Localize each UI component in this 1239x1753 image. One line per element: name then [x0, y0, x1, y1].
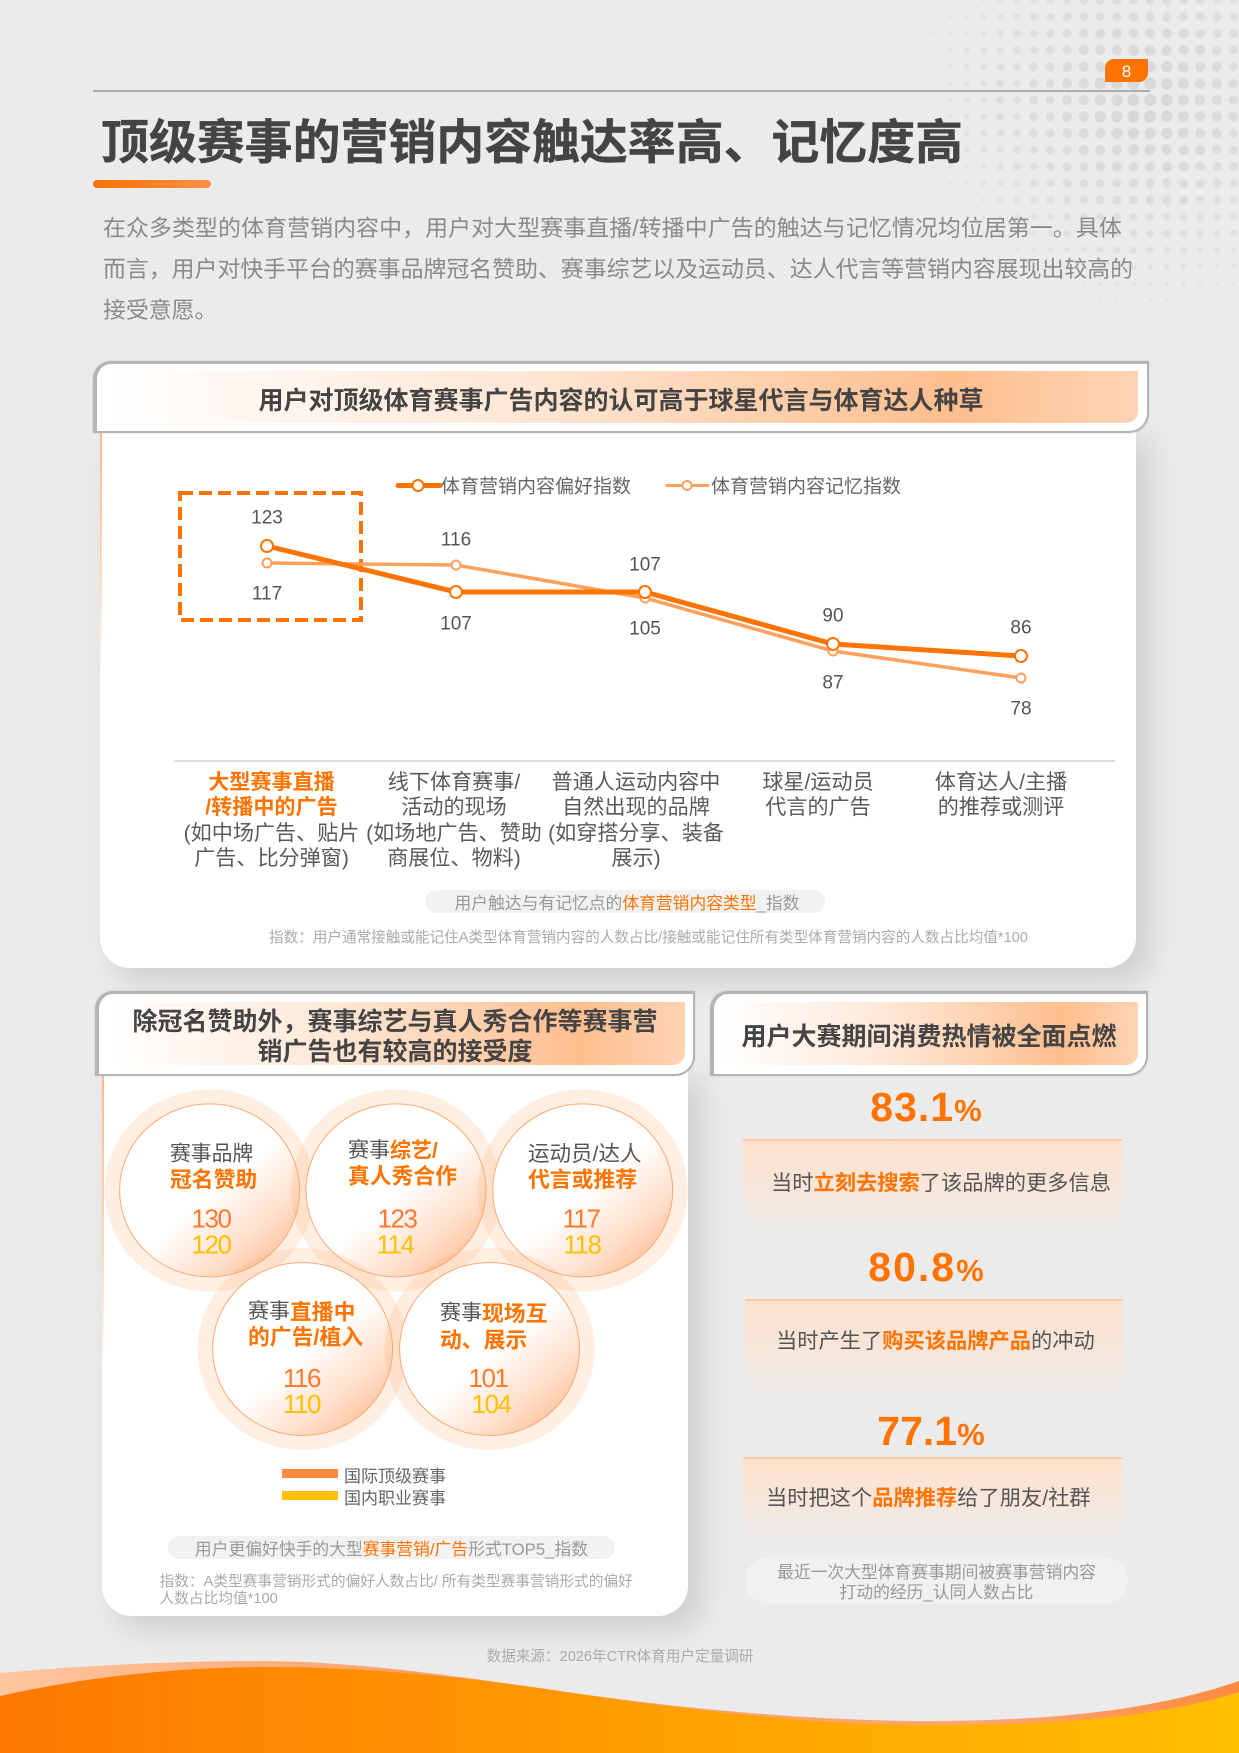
bubble: variety and reality show: 赛事综艺/ — [348, 1139, 438, 1162]
data labels: 105 — [629, 618, 661, 640]
bubble: variety and reality show: 114 — [377, 1230, 415, 1260]
legend: bubble colours — [282, 1467, 446, 1508]
title: 顶级赛事的营销内容触达率高、记忆度高 — [101, 117, 963, 170]
data labels: 107 — [629, 554, 661, 576]
heading: top 5: 除冠名赞助外，赛事综艺与真人秀合作等赛事营 — [132, 1008, 658, 1036]
category label 3: 自然出现的品牌 — [562, 796, 710, 819]
series: memory index — [262, 558, 1026, 682]
bubble: title sponsorship: 冠名赞助 — [170, 1167, 257, 1192]
category label 1: 大型赛事直播 — [208, 771, 335, 794]
panel: ad content recognition line chart — [100, 425, 1136, 968]
data labels: 87 — [822, 672, 844, 694]
panel header: top 5 — [95, 991, 695, 1076]
stat caption pill: 打动的经历_认同人数占比 — [840, 1582, 1033, 1602]
bubble: title sponsorship: 130 — [192, 1204, 231, 1234]
data source: 数据来源：2026年CTR体育用户定量调研 — [487, 1649, 753, 1665]
heading: top 5 — [132, 1008, 658, 1066]
bubble: athlete endorsement: 117 — [563, 1204, 601, 1234]
highlight dashed box — [180, 493, 361, 620]
panel header: chart panel — [93, 361, 1149, 433]
data labels: 78 — [1010, 698, 1032, 720]
bubble: variety and reality show — [291, 1089, 501, 1291]
bubble: live broadcast ads: 的广告/植入 — [248, 1324, 363, 1350]
category label 4: 代言的广告 — [765, 796, 871, 819]
stat box 3 — [743, 1457, 1122, 1538]
data labels: 90 — [822, 606, 844, 626]
stat box 2 — [745, 1298, 1123, 1392]
bubble: on-site interaction: 赛事现场互 — [440, 1300, 547, 1326]
bubble: athlete endorsement: 代言或推荐 — [528, 1167, 637, 1192]
legend: bubble colours: 国际顶级赛事 — [344, 1467, 446, 1486]
bubble: athlete endorsement — [478, 1089, 688, 1291]
data labels: 123 — [251, 508, 283, 528]
stat caption pill: 最近一次大型体育赛事期间被赛事营销内容 — [777, 1562, 1096, 1582]
category label 3: 展示) — [611, 847, 661, 870]
category label 1 — [184, 770, 359, 870]
intro paragraph: 在众多类型的体育营销内容中，用户对大型赛事直播/转播中广告的触达与记忆情况均位居第一。具体 — [103, 214, 1122, 240]
category label 4: 球星/运动员 — [762, 771, 874, 794]
intro paragraph — [103, 214, 1133, 322]
stat box 2: 当时产生了购买该品牌产品的冲动 — [776, 1328, 1095, 1352]
category label 2: 活动的现场 — [401, 796, 507, 819]
category label 5: 的推荐或测评 — [938, 796, 1064, 819]
page number tab — [1105, 59, 1148, 82]
bubble: on-site interaction: 104 — [472, 1389, 511, 1419]
bubble: variety and reality show: 真人秀合作 — [348, 1164, 457, 1188]
category label 1: (如中场广告、贴片 — [184, 822, 359, 845]
bubble group — [104, 1090, 688, 1450]
category label 2: (如场地广告、赞助 — [366, 822, 542, 845]
category label 1: /转播中的广告 — [205, 796, 338, 819]
category label 3: 普通人运动内容中 — [552, 771, 720, 794]
stat box 1: 当时立刻去搜索了该品牌的更多信息 — [771, 1171, 1111, 1195]
legend: memory index: 体育营销内容记忆指数 — [711, 476, 901, 498]
bubble index note: 指数：A类型赛事营销形式的偏好人数占比/ 所有类型赛事营销形式的偏好 — [160, 1574, 633, 1590]
bubble: live broadcast ads: 赛事直播中 — [248, 1299, 355, 1324]
bubble: on-site interaction — [385, 1248, 595, 1450]
bubble: athlete endorsement: 118 — [564, 1230, 602, 1260]
category label 3 — [548, 771, 724, 870]
bubble: variety and reality show: 123 — [378, 1204, 417, 1234]
footer wave — [0, 1661, 1239, 1753]
title underline accent — [93, 180, 211, 188]
category label 2: 商展位、物料) — [387, 847, 521, 870]
chart caption pill: 用户触达与有记忆点的体育营销内容类型_指数 — [454, 894, 800, 913]
bubble: title sponsorship: 120 — [192, 1230, 231, 1260]
stat caption pill — [745, 1556, 1128, 1604]
stat: 80.8%: 80.8% — [868, 1244, 984, 1290]
stat: 77.1%: 77.1% — [877, 1408, 985, 1454]
category label 1: 广告、比分弹窗) — [194, 847, 349, 870]
bubble caption pill: 用户更偏好快手的大型赛事营销/广告形式TOP5_指数 — [195, 1540, 588, 1558]
bubble index note — [160, 1573, 633, 1607]
series: preference index — [261, 540, 1027, 662]
panel: top 5 ad forms — [102, 1066, 688, 1616]
bubble: on-site interaction: 动、展示 — [440, 1328, 527, 1352]
chart index note: 指数：用户通常接触或能记住A类型体育营销内容的人数占比/接触或能记住所有类型体育营销内容的人数占比均值*100 — [269, 930, 1028, 946]
heading: consumption enthusiasm: 用户大赛期间消费热情被全面点燃 — [741, 1023, 1116, 1051]
bubble index note: 人数占比均值*100 — [160, 1591, 278, 1607]
bubble: title sponsorship: 赛事品牌 — [170, 1142, 253, 1166]
category label 2: 线下体育赛事/ — [388, 771, 520, 794]
panel header: consumption enthusiasm — [710, 991, 1148, 1076]
data labels: 116 — [441, 530, 471, 550]
category label 5 — [935, 770, 1067, 819]
category label 3: (如穿搭分享、装备 — [548, 822, 724, 845]
legend: preference index: 体育营销内容偏好指数 — [441, 476, 631, 498]
bubble: on-site interaction: 101 — [469, 1363, 508, 1393]
bubble: title sponsorship — [105, 1089, 315, 1291]
stat: 83.1%: 83.1% — [870, 1084, 982, 1130]
intro paragraph: 而言，用户对快手平台的赛事品牌冠名赞助、赛事综艺以及运动员、达人代言等营销内容展现出较高的 — [103, 256, 1133, 282]
intro paragraph: 接受意愿。 — [103, 296, 217, 322]
data labels: 107 — [440, 614, 472, 634]
category label 4 — [762, 771, 874, 819]
bubble: live broadcast ads: 110 — [283, 1389, 321, 1419]
category label 2 — [366, 770, 542, 870]
data labels: 117 — [252, 584, 282, 604]
heading: chart panel: 用户对顶级体育赛事广告内容的认可高于球星代言与体育达人种草 — [258, 387, 984, 415]
stat box 1 — [743, 1139, 1122, 1231]
heading: top 5: 销广告也有较高的接受度 — [257, 1038, 532, 1066]
stat box 3: 当时把这个品牌推荐给了朋友/社群 — [766, 1486, 1091, 1510]
bubble: live broadcast ads — [198, 1248, 408, 1450]
category label 5: 体育达人/主播 — [935, 771, 1067, 794]
data labels — [251, 508, 1032, 720]
legend: bubble colours: 国内职业赛事 — [344, 1489, 446, 1508]
bubble: athlete endorsement: 运动员/达人 — [528, 1142, 641, 1166]
line chart — [178, 476, 1032, 720]
bubble: live broadcast ads: 116 — [283, 1363, 321, 1393]
data labels: 86 — [1010, 618, 1032, 638]
page number tab: 8 — [1122, 62, 1131, 81]
